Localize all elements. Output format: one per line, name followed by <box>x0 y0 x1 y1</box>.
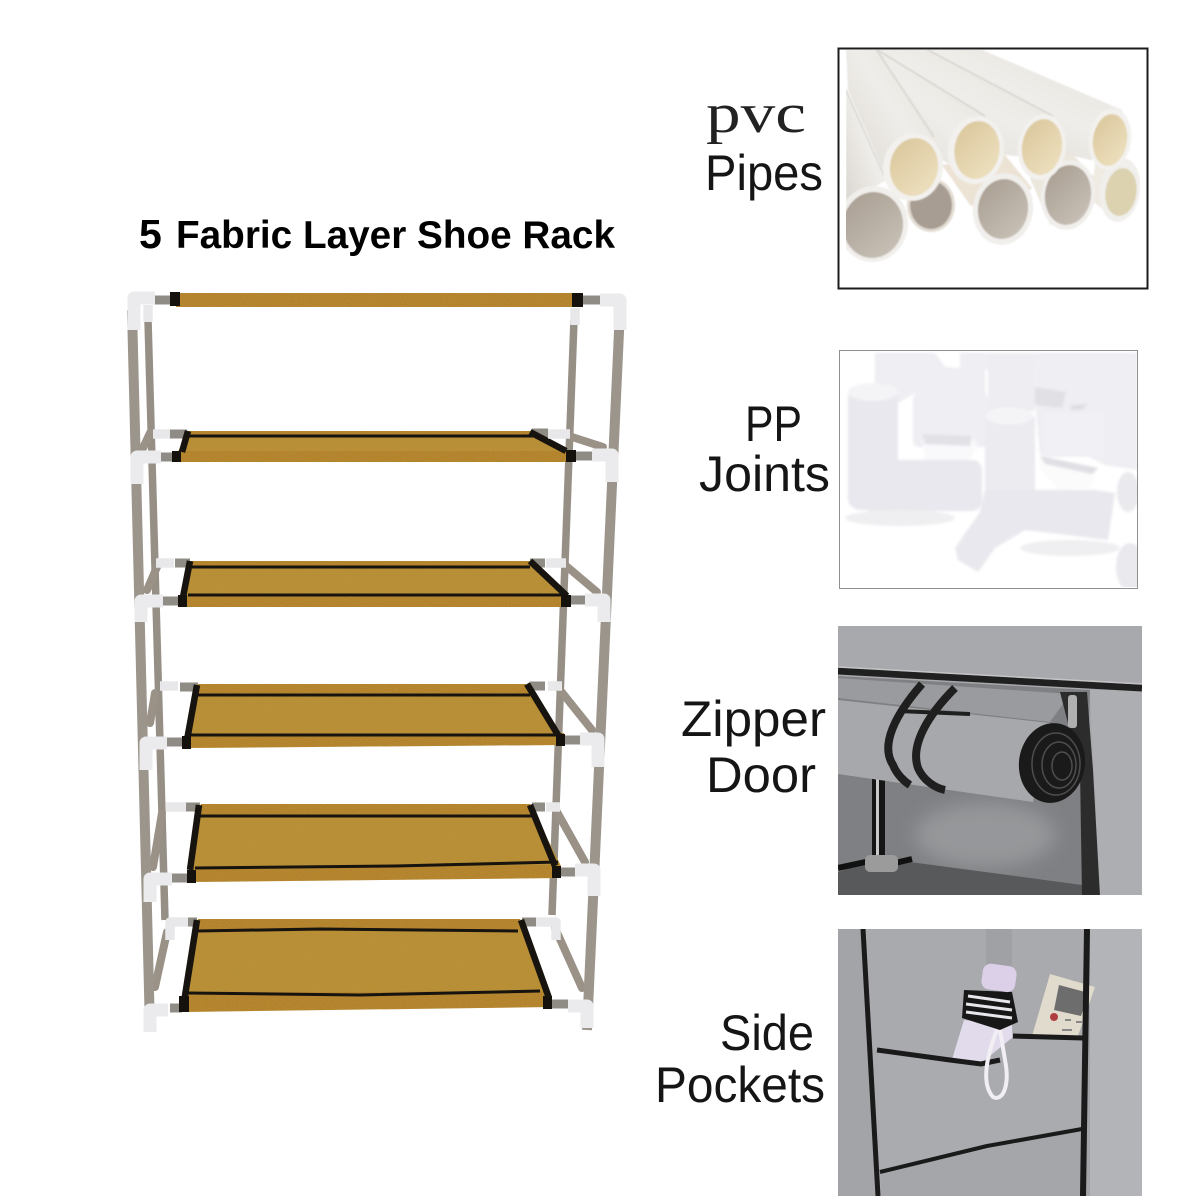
shelf 5 <box>150 804 594 902</box>
label: zipper door <box>681 691 826 803</box>
label: zipper door: Door <box>706 747 816 803</box>
shelf 1 <box>134 292 620 330</box>
shelf 3 <box>141 561 604 622</box>
umbrella <box>950 963 1018 1066</box>
remote control <box>1032 974 1095 1036</box>
door panel and zipper <box>838 667 1142 896</box>
label: pvc pipes: pvc <box>706 83 806 145</box>
pocket fronts <box>876 1030 1082 1174</box>
title: Fabric Layer Shoe Rack <box>176 214 616 257</box>
label: pvc pipes: Pipes <box>705 145 823 201</box>
side diagonal rails <box>143 433 603 988</box>
background joints <box>875 353 1137 470</box>
label: side pockets: Pockets <box>655 1057 825 1113</box>
label: pp joints: PP <box>745 396 802 452</box>
label: side pockets: Side <box>720 1005 814 1061</box>
panel: side pockets photo <box>838 929 1142 1196</box>
shelf 4 <box>146 684 598 770</box>
panel: pp joints photo <box>840 350 1144 591</box>
pipes lower row <box>833 91 1144 267</box>
front joints <box>848 353 1115 572</box>
panel: zipper door photo <box>838 626 1142 896</box>
label: pp joints: Joints <box>699 446 830 502</box>
interior of rack <box>838 676 1090 895</box>
rolled-up door <box>838 684 1090 807</box>
front legs <box>132 310 620 1030</box>
label: pp joints <box>699 396 830 502</box>
shoe rack illustration <box>132 292 620 1032</box>
label: side pockets <box>655 1005 825 1113</box>
shelf 6 <box>150 919 587 1032</box>
pipes upper row <box>846 48 1135 205</box>
black binding edges <box>863 929 1087 1196</box>
panel: pvc pipes photo <box>833 48 1148 288</box>
label: zipper door: Zipper <box>681 691 826 747</box>
title: 5 <box>139 211 162 257</box>
back legs <box>148 320 574 920</box>
label: pvc pipes <box>705 83 823 201</box>
shelf 2 <box>137 431 612 484</box>
